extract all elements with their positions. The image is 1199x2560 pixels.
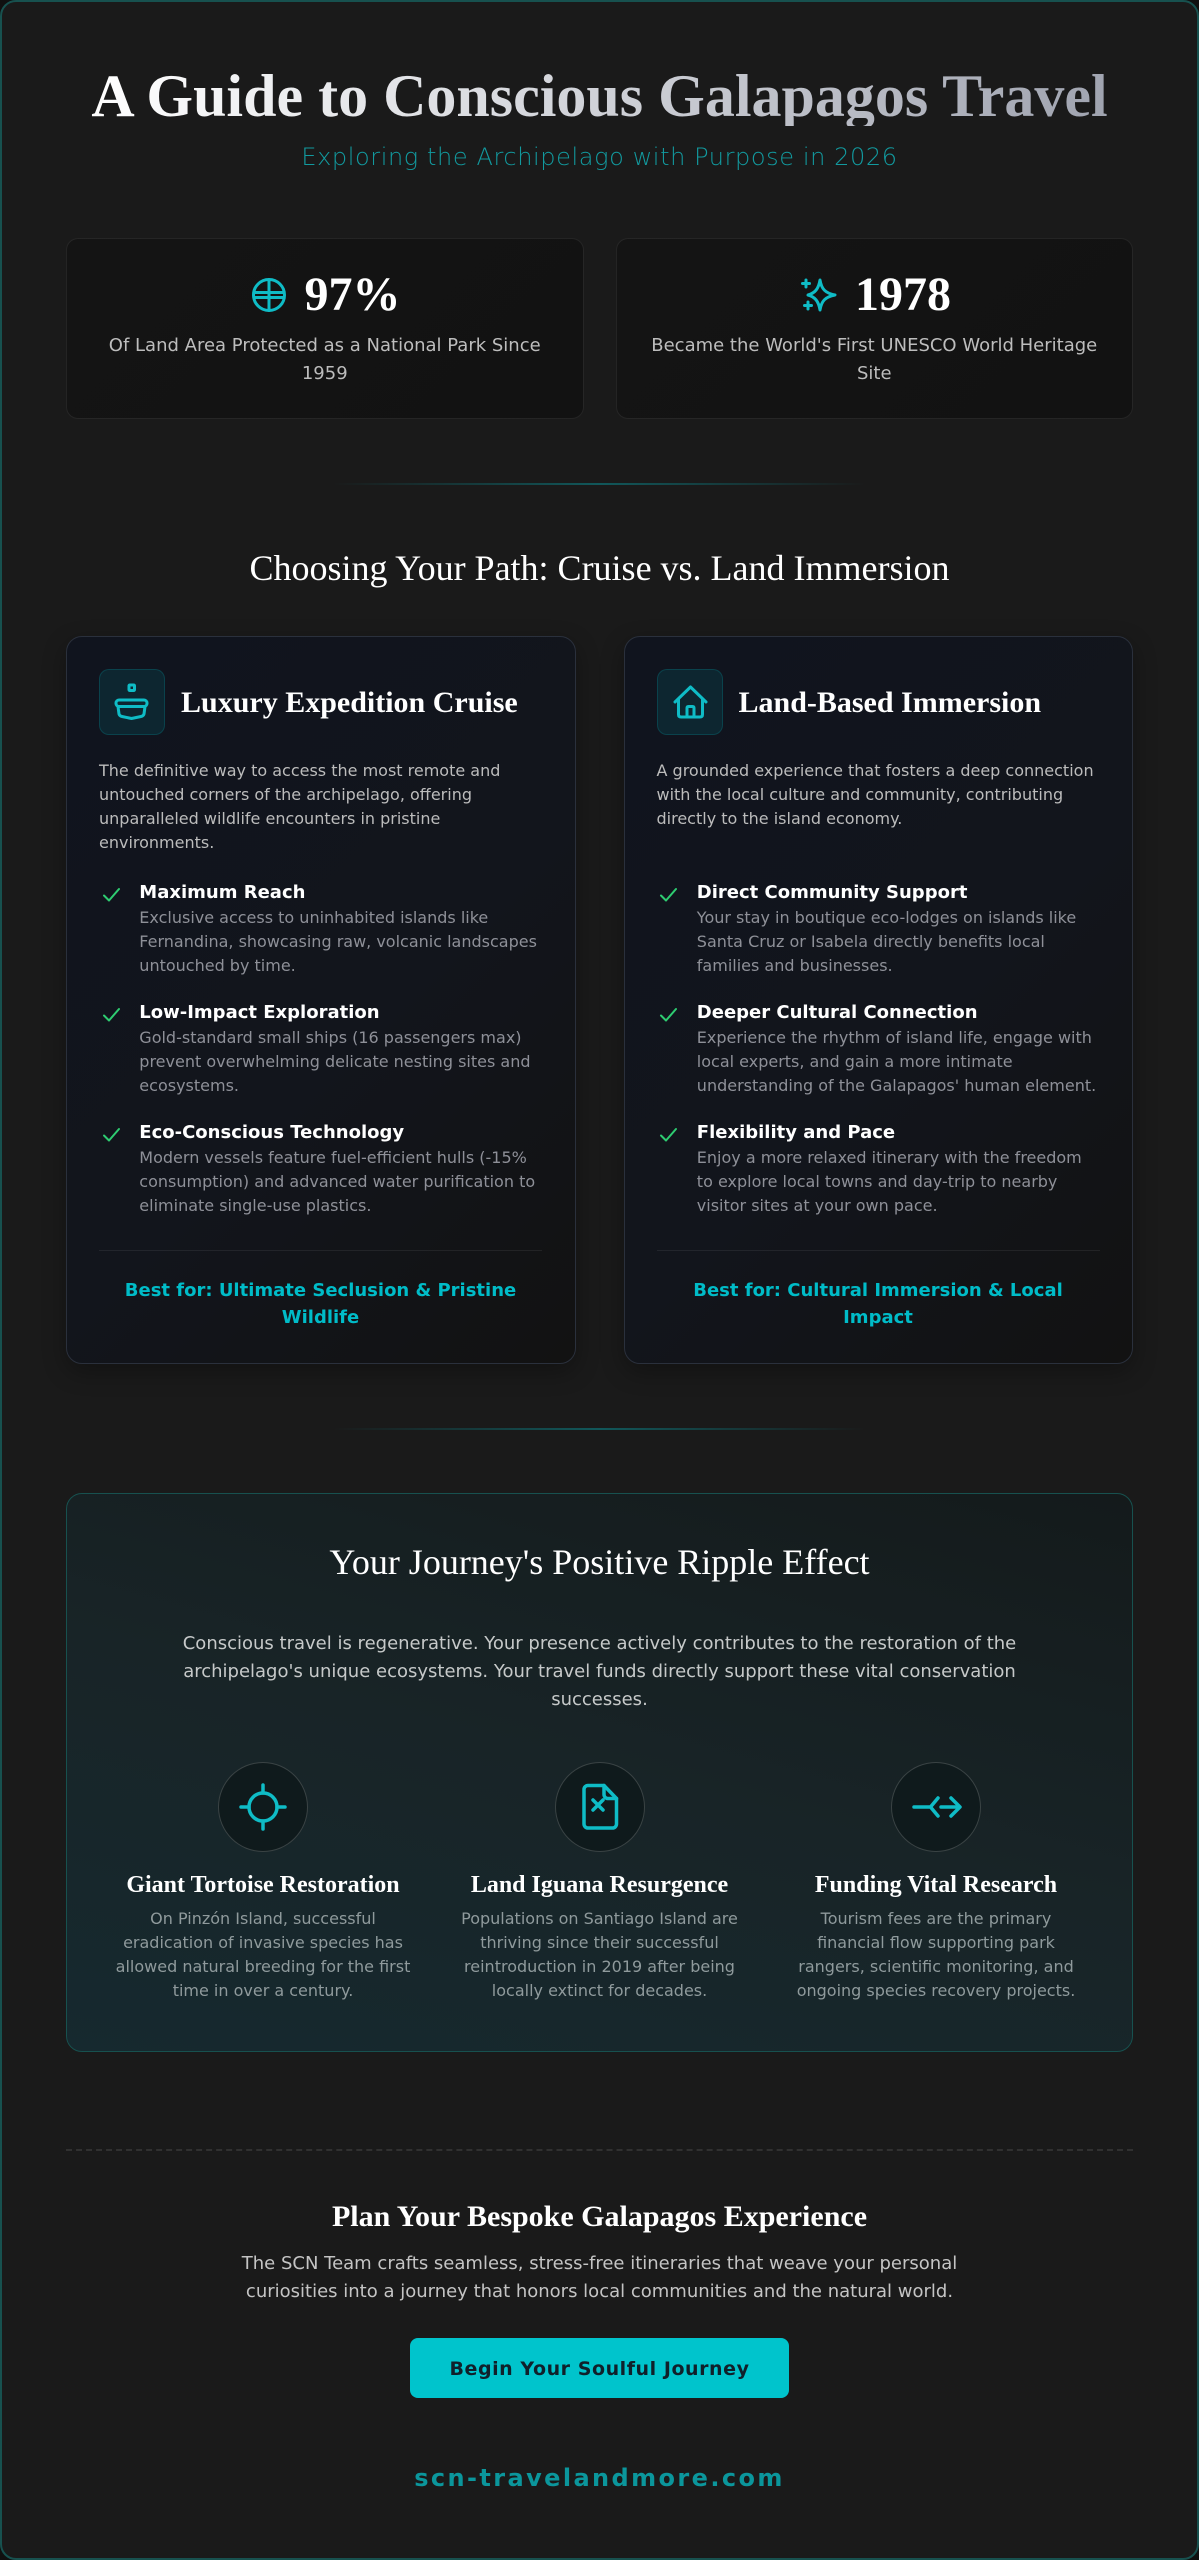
- benefit heading: Flexibility and Pace: [697, 1122, 895, 1143]
- best for label: [693, 1280, 1063, 1328]
- icon: crosshair: [218, 1762, 308, 1852]
- best for label: Best for: Ultimate Seclusion & Pristine: [125, 1280, 516, 1301]
- impact text: Populations on Santiago Island are: [461, 1909, 738, 1928]
- benefit heading: Low-Impact Exploration: [139, 1002, 380, 1023]
- best for label: Impact: [843, 1307, 913, 1328]
- call to action text: [242, 2253, 957, 2302]
- icon: check: [103, 1008, 120, 1022]
- best for label: [125, 1280, 516, 1328]
- icon: house: [656, 669, 722, 735]
- intro paragraph: successes.: [551, 1689, 648, 1710]
- stat description: [651, 335, 1097, 384]
- stat description: Of Land Area Protected as a National Park Since: [109, 335, 541, 356]
- benefit text: Santa Cruz or Isabela directly benefits local: [697, 932, 1045, 951]
- benefit text: [696, 908, 1076, 975]
- impact title: Land Iguana Resurgence: [471, 1872, 728, 1898]
- panel: positive ripple effect: [66, 1493, 1133, 2052]
- intro text: unparalleled wildlife encounters in pristine: [99, 809, 440, 828]
- divider: [333, 483, 866, 485]
- impact text: allowed natural breeding for the first: [116, 1957, 410, 1976]
- benefit heading: Direct Community Support: [697, 882, 967, 903]
- benefit text: consumption) and advanced water purification to: [139, 1172, 535, 1191]
- impact title: Funding Vital Research: [815, 1872, 1057, 1898]
- benefit text: prevent overwhelming delicate nesting sites and: [139, 1052, 530, 1071]
- website footer: scn-travelandmore.com: [414, 2464, 785, 2492]
- benefit text: Your stay in boutique eco-lodges on islands like: [697, 908, 1076, 927]
- benefit text: local experts, and gain a more intimate: [697, 1052, 1013, 1071]
- heading: Your Journey's Positive Ripple Effect: [329, 1542, 870, 1582]
- button: Begin Your Soulful Journey: [449, 2358, 750, 2380]
- icon: arrows: [891, 1762, 981, 1852]
- benefit: deeper cultural connection: [660, 1002, 1096, 1095]
- impact text: thriving since their successful: [480, 1933, 719, 1952]
- intro paragraph: Conscious travel is regenerative. Your presence actively contributes to the restoration of the: [183, 1633, 1016, 1654]
- panel: land-based immersion: [624, 636, 1133, 1364]
- benefit: eco-conscious technology: [103, 1122, 535, 1215]
- impact text: rangers, scientific monitoring, and: [798, 1957, 1074, 1976]
- icon: check: [660, 1128, 677, 1142]
- subtitle: Exploring the Archipelago with Purpose in 2026: [301, 143, 898, 171]
- impact: land iguana: [461, 1762, 738, 2000]
- benefit: maximum reach: [103, 882, 537, 975]
- benefit text: [139, 1028, 530, 1095]
- benefit text: Fernandina, showcasing raw, volcanic landscapes: [139, 932, 537, 951]
- benefit text: Enjoy a more relaxed itinerary with the freedom: [697, 1148, 1082, 1167]
- benefit text: [139, 1148, 535, 1215]
- title: A Guide to Conscious Galapagos Travel: [91, 62, 1108, 128]
- impact text: On Pinzón Island, successful: [150, 1909, 376, 1928]
- call to action text: The SCN Team crafts seamless, stress-free itineraries that weave your personal: [242, 2253, 957, 2274]
- best for label: Best for: Cultural Immersion & Local: [693, 1280, 1063, 1301]
- intro text: untouched corners of the archipelago, offering: [99, 785, 472, 804]
- card title: Land-Based Immersion: [738, 686, 1041, 719]
- stat description: 1959: [302, 363, 348, 384]
- card title: Luxury Expedition Cruise: [181, 686, 518, 719]
- impact text: financial flow supporting park: [817, 1933, 1055, 1952]
- call to action text: curiosities into a journey that honors local communities and the natural world.: [246, 2281, 953, 2302]
- impact title: Giant Tortoise Restoration: [126, 1872, 400, 1898]
- benefit text: [697, 1028, 1096, 1095]
- intro text: [656, 761, 1094, 828]
- benefit text: Modern vessels feature fuel-efficient hulls (-15%: [139, 1148, 527, 1167]
- icon: document x: [554, 1762, 644, 1852]
- intro text: environments.: [99, 833, 214, 852]
- impact text: reintroduction in 2019 after being: [464, 1957, 735, 1976]
- benefit text: visitor sites at your own pace.: [697, 1196, 938, 1215]
- icon: check: [103, 1128, 120, 1142]
- panel: luxury expedition cruise: [66, 636, 576, 1364]
- divider: [333, 1428, 866, 1430]
- impact text: locally extinct for decades.: [492, 1981, 707, 2000]
- stat description: Site: [857, 363, 892, 384]
- benefit: low-impact exploration: [103, 1002, 530, 1095]
- call to action heading: Plan Your Bespoke Galapagos Experience: [332, 2200, 867, 2233]
- heading: choosing your path: Choosing Your Path: Cruise vs. Land Immersion: [249, 548, 950, 588]
- stat number: 1978: [855, 268, 951, 321]
- icon: ship: [99, 669, 165, 735]
- impact text: [461, 1909, 738, 2000]
- benefit text: families and businesses.: [697, 956, 893, 975]
- impact text: eradication of invasive species has: [123, 1933, 403, 1952]
- impact text: time in over a century.: [173, 1981, 353, 2000]
- impact text: [116, 1909, 410, 2000]
- intro text: A grounded experience that fosters a deep connection: [656, 761, 1094, 780]
- benefit text: Experience the rhythm of island life, engage with: [697, 1028, 1092, 1047]
- benefit text: Exclusive access to uninhabited islands like: [139, 908, 488, 927]
- benefit text: ecosystems.: [139, 1076, 239, 1095]
- icon: check: [660, 888, 677, 902]
- impact: giant tortoise: [116, 1762, 410, 2000]
- benefit text: understanding of the Galapagos' human element.: [697, 1076, 1096, 1095]
- panel: stat 97%: [66, 238, 584, 419]
- icon: globe: [252, 278, 286, 312]
- benefit text: eliminate single-use plastics.: [139, 1196, 371, 1215]
- benefit heading: Eco-Conscious Technology: [139, 1122, 404, 1143]
- benefit text: Gold-standard small ships (16 passengers max): [139, 1028, 522, 1047]
- intro paragraph: [183, 1633, 1016, 1710]
- benefit heading: Deeper Cultural Connection: [697, 1002, 978, 1023]
- intro text: with the local culture and community, contributing: [656, 785, 1063, 804]
- benefit text: [697, 1148, 1082, 1215]
- benefit text: to explore local towns and day-trip to nearby: [697, 1172, 1057, 1191]
- benefit text: [139, 908, 537, 975]
- icon: sparkles: [801, 278, 836, 312]
- intro text: The definitive way to access the most remote and: [99, 761, 500, 780]
- impact text: ongoing species recovery projects.: [797, 1981, 1075, 2000]
- icon: check: [660, 1008, 677, 1022]
- stat description: Became the World's First UNESCO World Heritage: [651, 335, 1097, 356]
- intro text: [98, 761, 500, 852]
- impact: funding research: [797, 1762, 1075, 2000]
- panel: stat 1978: [616, 238, 1133, 419]
- icon: check: [103, 888, 120, 902]
- button: [410, 2338, 789, 2398]
- impact text: [797, 1909, 1075, 2000]
- stat description: [109, 335, 541, 384]
- intro text: directly to the island economy.: [656, 809, 902, 828]
- impact text: Tourism fees are the primary: [821, 1909, 1051, 1928]
- stat number: 97%: [304, 268, 400, 321]
- benefit: direct community support: [660, 882, 1076, 975]
- intro paragraph: archipelago's unique ecosystems. Your travel funds directly support these vital conservation: [183, 1661, 1016, 1682]
- benefit heading: Maximum Reach: [139, 882, 305, 903]
- benefit: flexibility and pace: [660, 1122, 1082, 1215]
- best for label: Wildlife: [282, 1307, 359, 1328]
- benefit text: untouched by time.: [139, 956, 296, 975]
